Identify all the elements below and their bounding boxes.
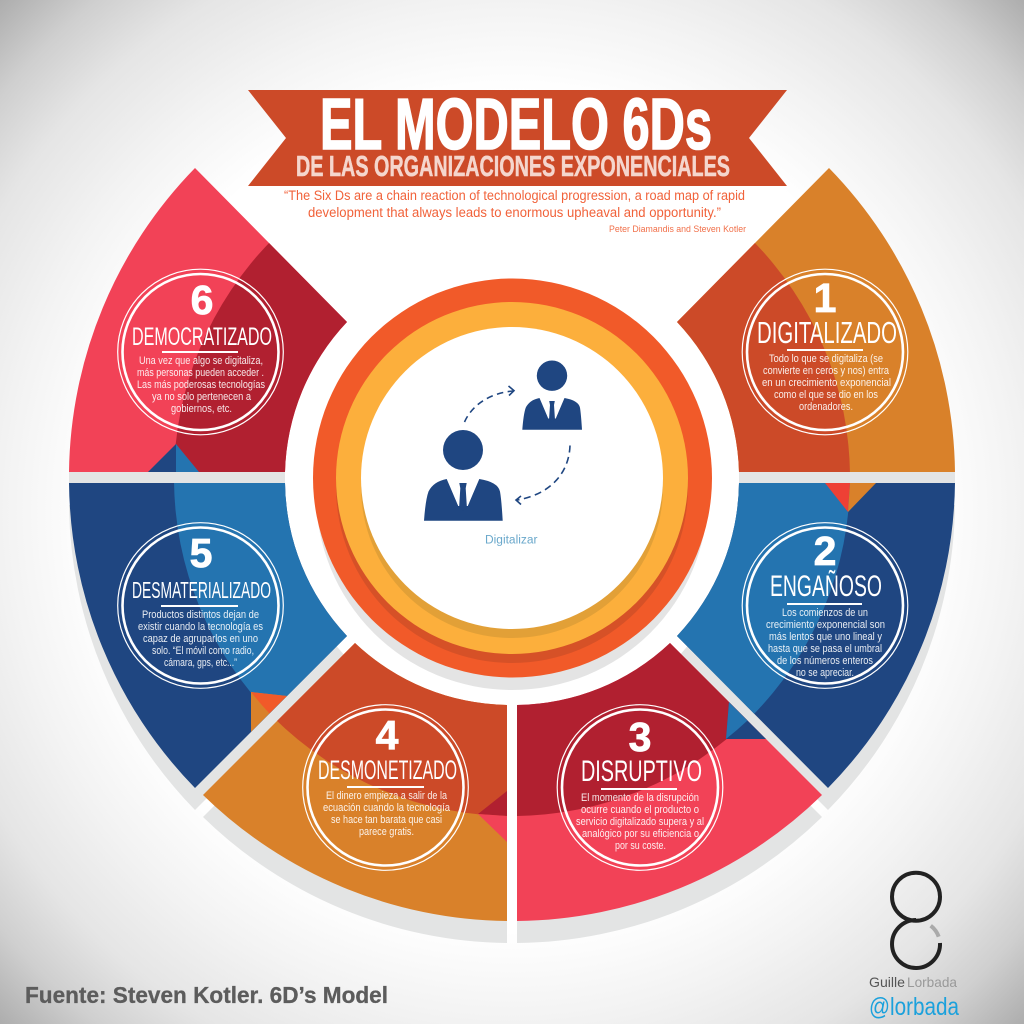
title: EL MODELO 6Ds bbox=[320, 85, 712, 165]
social handle: @lorbada bbox=[869, 993, 959, 1021]
panel: segment 1 digitalizado bbox=[677, 168, 955, 472]
arrow: dashed arrow to large person bbox=[516, 446, 570, 504]
badge 1: digitalizado: 1 bbox=[814, 275, 836, 321]
badge 4: desmonetizado: DESMONETIZADO bbox=[318, 755, 457, 785]
quote: “The Six Ds are a chain reaction of technological progression, a road map of rapid bbox=[284, 188, 745, 203]
badge 6: democratizado: Las más poderosas tecnologías bbox=[137, 379, 266, 391]
quote attribution: Peter Diamandis and Steven Kotler bbox=[609, 224, 746, 234]
logo: Guille Lorbada: Guille bbox=[869, 974, 905, 990]
badge 5: desmaterializado: capaz de agruparlos en uno bbox=[143, 633, 258, 645]
badge 3: disruptivo: 3 bbox=[629, 714, 651, 760]
badge 6: democratizado: ya no solo pertenecen a bbox=[152, 391, 251, 403]
icon: small person bbox=[522, 360, 582, 430]
quote: development that always leads to enormous upheaval and opportunity.” bbox=[308, 205, 721, 220]
badge 1: digitalizado: en un crecimiento exponencial bbox=[762, 377, 891, 389]
subtitle: DE LAS ORGANIZACIONES EXPONENCIALES bbox=[296, 151, 730, 183]
panel: segment 6 democratizado bbox=[69, 168, 347, 472]
panel: segment 3 disruptivo bbox=[517, 643, 822, 921]
badge 2: enganoso: hasta que se pasa el umbral bbox=[768, 643, 882, 655]
badge 5: desmaterializado bbox=[118, 523, 283, 688]
arrow: dashed arrow to small person bbox=[464, 386, 514, 422]
badge 4: desmonetizado: se hace tan barata que casi bbox=[331, 814, 442, 826]
icon: large person bbox=[424, 430, 503, 521]
badge 3: disruptivo: analógico por su eficiencia o bbox=[582, 828, 699, 840]
badge 4: desmonetizado: 4 bbox=[376, 712, 399, 758]
logo: Guille Lorbada bbox=[869, 873, 957, 990]
panel: segment 5 desmaterializado bbox=[69, 483, 347, 788]
badge 5: desmaterializado: solo. “El móvil como radio, bbox=[152, 645, 254, 657]
source note: Fuente: Steven Kotler. 6D’s Model bbox=[25, 982, 388, 1008]
badge 4: desmonetizado: ecuación cuando la tecnología bbox=[323, 802, 450, 814]
badge 3: disruptivo: ocurre cuando el producto o bbox=[581, 804, 699, 816]
badge 5: desmaterializado: 5 bbox=[190, 530, 212, 576]
badge 3: disruptivo: DISRUPTIVO bbox=[581, 755, 702, 788]
badge 3: disruptivo: servicio digitalizado supera y al bbox=[576, 816, 704, 828]
badge 1: digitalizado: como el que se dio en los bbox=[774, 389, 878, 401]
badge 2: enganoso: crecimiento exponencial son bbox=[766, 619, 885, 631]
badge 6: democratizado: DEMOCRATIZADO bbox=[132, 323, 272, 351]
badge 5: desmaterializado: existir cuando la tecnología es bbox=[138, 621, 264, 633]
badge 2: enganoso: ENGAÑOSO bbox=[770, 569, 882, 603]
badge 3: disruptivo: por su coste. bbox=[615, 840, 666, 852]
badge 1: digitalizado bbox=[742, 269, 908, 435]
badge 6: democratizado: más personas pueden acceder . bbox=[137, 367, 264, 379]
panel: segment 2 enganoso bbox=[677, 483, 955, 788]
badge 2: enganoso: Los comienzos de un bbox=[782, 607, 868, 619]
panel: segment 4 desmonetizado bbox=[203, 643, 507, 921]
badge 5: desmaterializado: cámara, gps, etc...” bbox=[164, 657, 237, 669]
badge 6: democratizado: Una vez que algo se digitaliza, bbox=[139, 355, 263, 367]
badge 4: desmonetizado bbox=[303, 705, 468, 870]
badge 2: enganoso: de los números enteros bbox=[777, 655, 873, 667]
badge 4: desmonetizado: El dinero empieza a salir de la bbox=[326, 790, 447, 802]
central concentric rings bbox=[313, 278, 712, 690]
badge 3: disruptivo: El momento de la disrupción bbox=[581, 792, 699, 804]
badge 1: digitalizado: convierte en ceros y nos) entra bbox=[763, 365, 889, 377]
badge 2: enganoso: 2 bbox=[814, 528, 836, 574]
badge 2: enganoso: más lentos que uno lineal y bbox=[769, 631, 883, 643]
badge 4: desmonetizado: parece gratis. bbox=[359, 826, 414, 838]
badge 5: desmaterializado: Productos distintos dejan de bbox=[142, 609, 259, 621]
badge 2: enganoso bbox=[742, 523, 908, 688]
badge 6: democratizado bbox=[118, 269, 283, 435]
caption: Digitalizar: Digitalizar bbox=[485, 534, 538, 546]
badge 1: digitalizado: Todo lo que se digitaliza (se bbox=[769, 353, 883, 365]
badge 5: desmaterializado: DESMATERIALIZADO bbox=[132, 577, 271, 603]
badge 1: digitalizado: ordenadores. bbox=[799, 401, 853, 413]
white disc behind the wheel bbox=[212, 178, 812, 778]
title banner bbox=[248, 90, 787, 186]
badge 6: democratizado: gobiernos, etc. bbox=[171, 403, 232, 415]
badge 3: disruptivo bbox=[557, 705, 723, 870]
badge 6: democratizado: 6 bbox=[191, 277, 213, 323]
badge 2: enganoso: no se apreciar. bbox=[796, 667, 854, 679]
logo: Guille Lorbada: Lorbada bbox=[907, 974, 957, 990]
badge 1: digitalizado: DIGITALIZADO bbox=[757, 315, 897, 350]
quote bbox=[284, 188, 745, 220]
segment drop shadows bbox=[69, 472, 955, 943]
